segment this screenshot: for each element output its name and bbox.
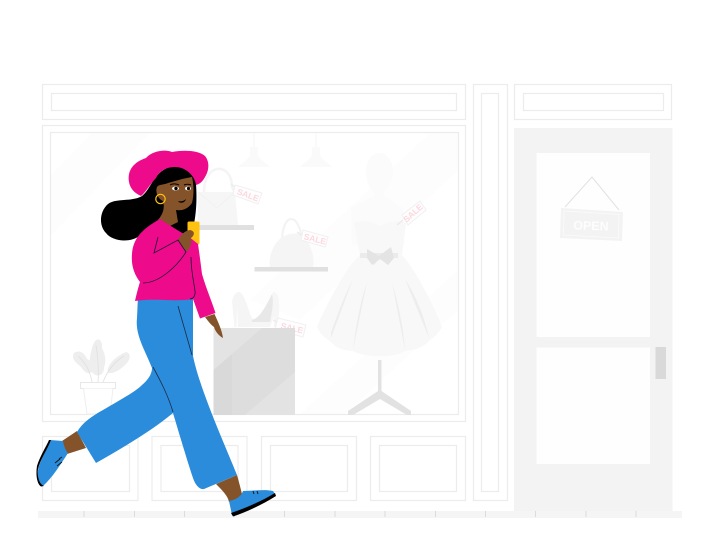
- mannequin head and torso: [351, 153, 404, 245]
- display pedestal: [214, 328, 295, 415]
- waist bow: [360, 253, 398, 265]
- sale tag 3: [273, 318, 306, 337]
- dress pleats: [331, 279, 429, 350]
- pants creases: [153, 306, 192, 412]
- door handle: [656, 347, 666, 379]
- heels: [232, 292, 279, 327]
- door lower glass: [536, 348, 650, 464]
- mannequin stand: [348, 360, 411, 415]
- sale tag 1: SALE: [236, 186, 261, 204]
- front shoe: [229, 490, 276, 516]
- lower hand: [205, 314, 223, 338]
- top shelf: [198, 225, 254, 230]
- front foot skin: [216, 475, 243, 502]
- eyes and mouth: [170, 184, 191, 203]
- sale tag 4: SALE: [401, 201, 425, 224]
- sweater folds: [143, 237, 195, 299]
- hat: [129, 151, 208, 196]
- hand on phone: [178, 230, 194, 252]
- door upper glass: [536, 153, 650, 337]
- mannequin with dress: [317, 153, 442, 415]
- ceiling lamps: [238, 133, 332, 167]
- open sign: OPEN: [573, 218, 609, 234]
- window reflections: [51, 133, 458, 414]
- long hair: [101, 166, 196, 240]
- sale tag 1: [231, 184, 262, 204]
- dress: [317, 221, 442, 356]
- potted plant: [73, 339, 130, 414]
- handbag on middle shelf: [254, 219, 328, 272]
- sale tag 2: SALE: [303, 231, 328, 247]
- phone: [188, 222, 200, 244]
- ground: [38, 511, 682, 518]
- back shoe: [36, 440, 68, 486]
- back foot skin: [62, 431, 86, 454]
- earring: [156, 194, 165, 204]
- open sign: [560, 177, 623, 241]
- middle shelf: [254, 267, 328, 272]
- sale tag 3: SALE: [280, 321, 304, 335]
- door: [514, 128, 672, 511]
- handbag on top shelf: [198, 169, 254, 230]
- woman walking: [36, 151, 276, 516]
- storefront frame: [42, 84, 672, 500]
- pants: [77, 296, 237, 489]
- sweater: [132, 219, 216, 318]
- face and neck: [156, 177, 194, 226]
